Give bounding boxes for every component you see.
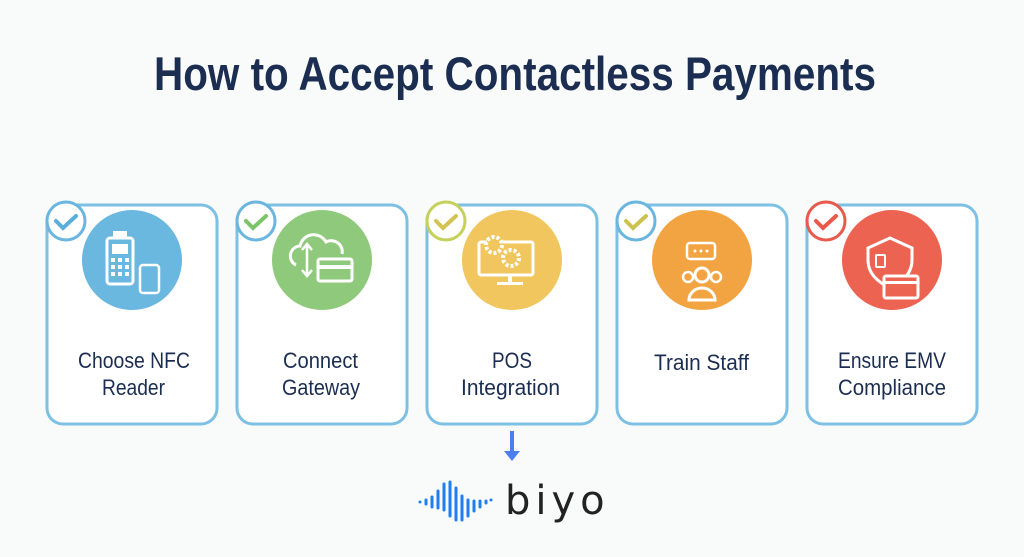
icon: card reader bbox=[82, 210, 182, 310]
label bbox=[838, 348, 946, 400]
label bbox=[461, 348, 560, 400]
arrow bbox=[504, 431, 520, 461]
badge: check bbox=[617, 202, 655, 240]
label: Choose NFC bbox=[78, 348, 190, 373]
label bbox=[78, 348, 190, 400]
icon: shield and card bbox=[842, 210, 942, 310]
card: choose NFC reader bbox=[47, 202, 217, 424]
logo: biyo: biyo bbox=[505, 478, 610, 524]
label: Gateway bbox=[282, 375, 360, 400]
label: Connect bbox=[283, 348, 358, 373]
icon: people with chat bbox=[652, 210, 752, 310]
label: Train Staff bbox=[654, 350, 750, 375]
icon: cloud and card bbox=[272, 210, 372, 310]
badge: check bbox=[807, 202, 845, 240]
card: connect gateway bbox=[237, 202, 407, 424]
title: How to Accept Contactless Payments bbox=[154, 47, 876, 100]
badge: check bbox=[237, 202, 275, 240]
card: POS integration bbox=[427, 202, 597, 424]
label: POS bbox=[492, 348, 532, 373]
icon: monitor with gears bbox=[462, 210, 562, 310]
badge: check bbox=[47, 202, 85, 240]
card: EMV compliance bbox=[807, 202, 977, 424]
logo: biyo bbox=[420, 478, 610, 524]
card: train staff bbox=[617, 202, 787, 424]
label bbox=[282, 348, 360, 400]
label: Compliance bbox=[838, 375, 946, 400]
badge: check bbox=[427, 202, 465, 240]
label: Reader bbox=[102, 375, 165, 400]
label: Integration bbox=[461, 375, 560, 400]
label: Ensure EMV bbox=[838, 348, 946, 373]
